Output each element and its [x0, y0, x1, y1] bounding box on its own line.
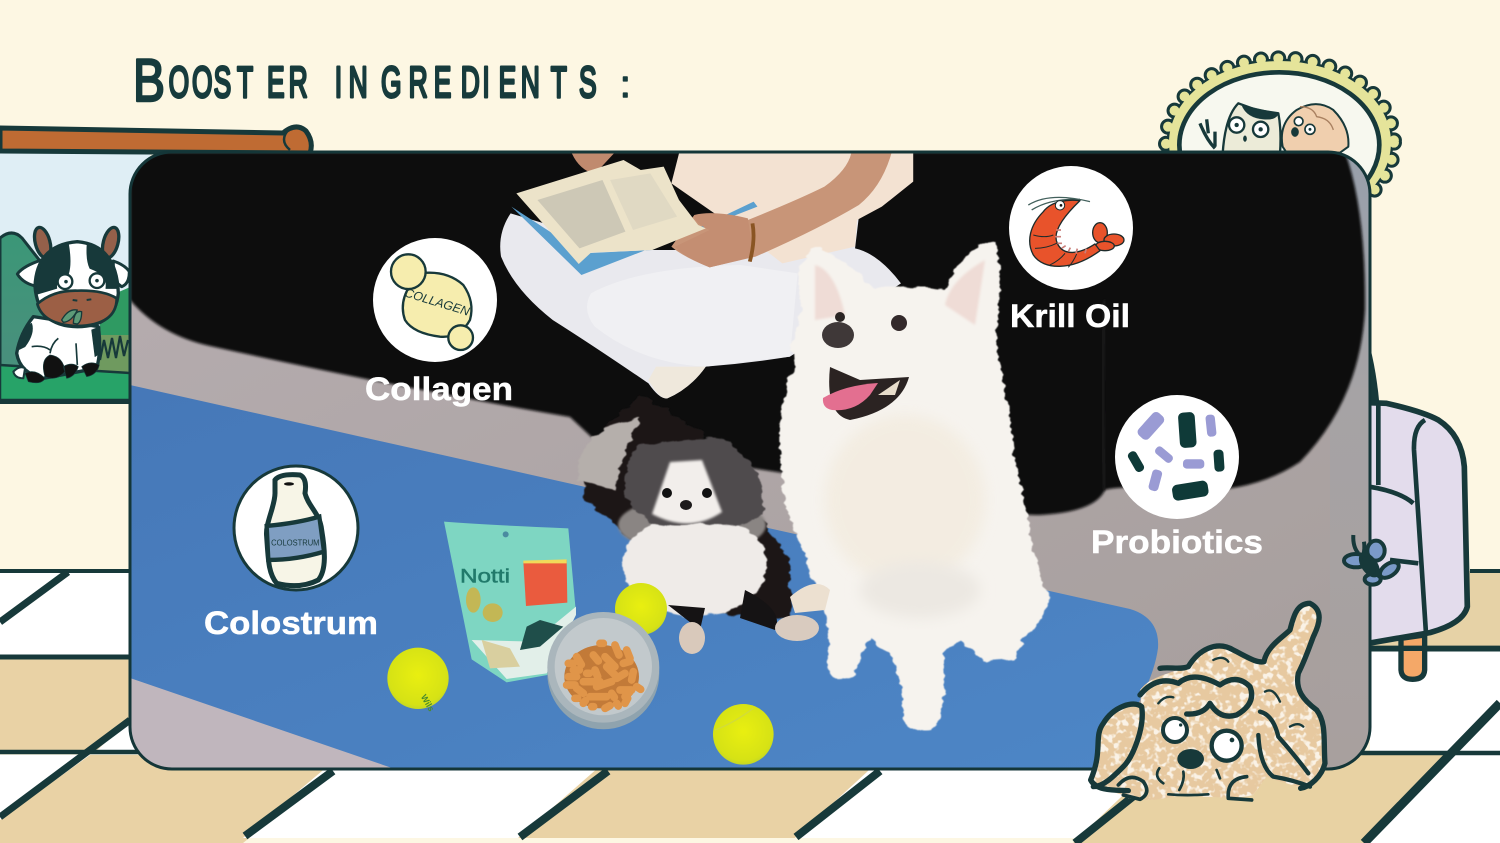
icon: collagen molecule — [373, 238, 497, 362]
poodle ears and fringe — [1140, 677, 1252, 716]
title — [133, 47, 631, 114]
photo panel — [130, 152, 1370, 769]
title: OOSTER INGREDIENTS — [169, 57, 597, 107]
ingredient: colostrum — [204, 466, 378, 641]
product bag — [444, 522, 576, 682]
icon: bee on armchair — [1344, 535, 1402, 585]
open book — [511, 202, 757, 275]
icon: bacteria — [1115, 395, 1239, 519]
ingredient: collagen — [365, 238, 513, 407]
icon: shrimp — [1009, 166, 1133, 290]
ingredient: krill oil — [1009, 166, 1133, 334]
fluffy chest — [623, 513, 767, 617]
title: : — [620, 64, 631, 106]
poodle body — [1091, 603, 1325, 800]
food bowl — [547, 669, 660, 730]
small black and white dog — [578, 395, 819, 654]
armchair — [1368, 347, 1500, 679]
poodle eyes and nose — [1163, 718, 1187, 742]
wall beam: log — [0, 127, 311, 153]
tennis ball: front — [713, 704, 774, 765]
picture sky — [0, 150, 150, 402]
poodle outline — [1091, 704, 1142, 791]
photo floor — [130, 152, 1370, 769]
paws — [679, 622, 705, 654]
black sofa — [130, 152, 1365, 515]
label: Collagen — [365, 371, 513, 407]
icon: milk bottle — [234, 466, 358, 590]
treat bag, bowl and balls: Wils — [419, 693, 437, 713]
arm and hand — [671, 153, 891, 267]
icon: cow — [13, 226, 129, 383]
grass — [100, 285, 135, 372]
icon: poodle in portrait — [1282, 104, 1348, 153]
label: Probiotics — [1091, 524, 1263, 560]
treat bag, bowl and balls: Notti — [460, 566, 510, 587]
yoga mat — [130, 385, 1158, 769]
head — [625, 438, 763, 526]
panel border — [130, 152, 1370, 769]
icon: milk bottle: COLOSTRUM — [271, 537, 320, 547]
seated person with book — [500, 153, 913, 398]
tennis ball: by bowl — [615, 583, 667, 635]
trousers — [500, 213, 901, 398]
round scalloped portrait frame — [1166, 58, 1394, 227]
hill — [0, 233, 60, 375]
ingredient: probiotics — [1091, 395, 1263, 560]
wall picture: cow in meadow — [0, 150, 150, 402]
kibble — [564, 645, 639, 708]
poodle peeking over panel — [1091, 603, 1325, 800]
label: Krill Oil — [1010, 298, 1130, 334]
tennis ball: left — [387, 648, 449, 709]
icon: collagen molecule: COLLAGEN — [403, 286, 471, 319]
shirt — [671, 153, 913, 263]
label: Colostrum — [204, 605, 378, 641]
tail — [578, 418, 640, 490]
chair leg — [1401, 635, 1425, 679]
icon: cat in portrait — [1200, 103, 1281, 154]
tiled floor — [0, 571, 1500, 843]
title: B — [133, 47, 165, 114]
face — [822, 312, 909, 420]
big white dog — [780, 243, 1050, 733]
treat bag, bowl and balls — [387, 522, 774, 765]
